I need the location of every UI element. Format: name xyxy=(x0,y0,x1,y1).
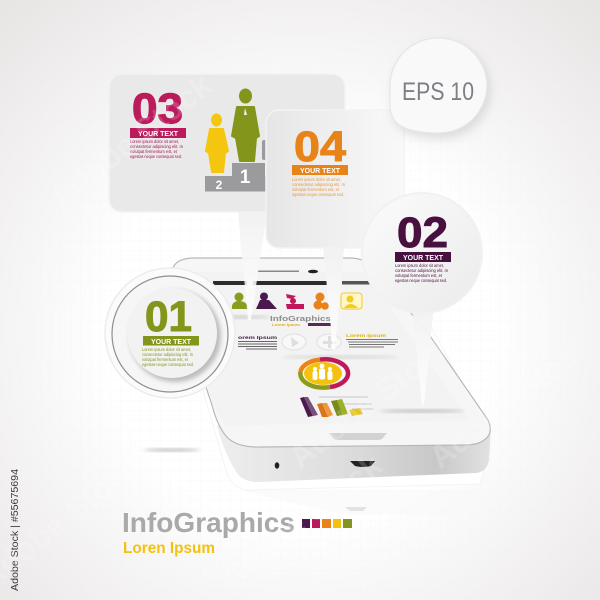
color squares xyxy=(302,519,352,528)
watermark: Adobe Stock xyxy=(42,67,219,216)
label bar 04: YOUR TEXT xyxy=(300,168,341,175)
pin 02 xyxy=(362,193,482,405)
podium: 1 xyxy=(240,167,251,188)
body text 02: Lorem ipsum dolor sit amet, xyxy=(395,263,444,268)
podium xyxy=(205,140,266,192)
body text 04: volutpat fermentum est, et xyxy=(292,187,340,192)
body text 01: volutpat fermentum est, et xyxy=(142,357,189,362)
phone body side xyxy=(217,425,491,482)
body text 02: consectetur adipiscing elit. In xyxy=(395,268,448,273)
person: green xyxy=(232,90,259,161)
body text 01: consectetur adipiscing elit. In xyxy=(142,352,193,357)
circle 01 outer ring xyxy=(105,268,235,398)
person: yellow xyxy=(206,114,228,172)
label bar 02 xyxy=(395,252,451,262)
home button xyxy=(329,433,387,440)
screen text right: Lorem Ipsum xyxy=(346,333,386,339)
podium: 2 xyxy=(216,178,223,192)
body text 03: volutpat fermentum est, et xyxy=(130,149,178,154)
body text 03 xyxy=(130,139,183,159)
ring chart xyxy=(296,356,350,390)
panel 04 xyxy=(266,110,404,350)
label bar 03 xyxy=(130,128,186,138)
icon: green person xyxy=(232,292,248,309)
shadow under buttons xyxy=(282,355,398,359)
phone face xyxy=(170,258,490,447)
watermark: Adobe Stock xyxy=(422,327,599,476)
body text 04: Lorem ipsum dolor sit amet, xyxy=(292,177,341,182)
stock credit: Adobe Stock | #55675694 xyxy=(9,469,21,591)
watermark: Adobe Stock xyxy=(212,447,389,596)
pin 02 circle xyxy=(362,193,482,313)
shadow under icons xyxy=(210,315,270,319)
phone reflection xyxy=(240,490,486,515)
icon: purple person xyxy=(256,292,277,309)
circle 01 inner xyxy=(129,290,221,382)
body text 03: Lorem ipsum dolor sit amet, xyxy=(130,139,179,144)
body text 04 xyxy=(292,177,345,197)
subtitle: Loren Ipsum xyxy=(123,540,215,557)
screen mini title xyxy=(270,314,331,327)
number 01: 01 xyxy=(145,293,192,341)
title: InfoGraphics xyxy=(122,507,295,538)
body text 02: volutpat fermentum est, et xyxy=(395,273,443,278)
label bar 02: YOUR TEXT xyxy=(403,255,444,262)
screen text left xyxy=(238,335,277,350)
number 02: 02 xyxy=(397,209,448,257)
body text 04: egestas neque consequat sed. xyxy=(292,192,344,197)
number 04: 04 xyxy=(294,123,346,171)
icon: yellow card xyxy=(341,293,362,309)
number 03: 03 xyxy=(132,85,183,133)
icon: crimson person xyxy=(286,294,304,309)
body text 02: egestas neque consequat sed. xyxy=(395,278,447,283)
badge: EPS 10: EPS 10 xyxy=(402,78,474,106)
watermark: Adobe Stock xyxy=(282,327,459,476)
ring people xyxy=(312,364,332,380)
body text 01: egestas neque consequat sed. xyxy=(142,362,194,367)
title xyxy=(122,507,352,557)
label bar 03: YOUR TEXT xyxy=(138,131,179,138)
phone outer halo xyxy=(180,260,492,490)
circle 01 xyxy=(105,268,235,398)
screen icons row xyxy=(232,292,362,310)
badge: EPS 10 xyxy=(390,38,487,133)
shadow under pin 02 xyxy=(380,409,464,413)
label bar 01: YOUR TEXT xyxy=(151,339,192,346)
3D bar chart xyxy=(300,397,374,417)
label bar 04 xyxy=(292,165,348,175)
icon: orange people xyxy=(314,292,329,310)
screen text left: orem Ipsum xyxy=(238,335,277,341)
body text 03: consectetur adipiscing elit. In xyxy=(130,144,183,149)
panel 03 background xyxy=(109,74,345,212)
body text 02 xyxy=(395,263,448,283)
usb port xyxy=(350,461,375,467)
panel 03 xyxy=(109,74,345,320)
phone screen xyxy=(180,272,470,426)
body text 01: Lorem ipsum dolor sit amet, xyxy=(142,347,191,352)
screen mini title: InfoGraphics xyxy=(270,314,331,323)
screen header bars xyxy=(213,270,371,285)
speaker hole xyxy=(275,462,279,469)
pin 02 stem xyxy=(412,305,434,405)
screen mini title: Lorem Ipsum xyxy=(272,323,301,327)
body text 03: egestas neque consequat sed. xyxy=(130,154,182,159)
body text 04: consectetur adipiscing elit. In xyxy=(292,182,345,187)
body text 01 xyxy=(142,347,194,367)
phone shadow on the left xyxy=(144,448,200,452)
panel 04 pointer xyxy=(323,247,344,350)
panel 04 background xyxy=(266,110,404,248)
panel 03 pointer xyxy=(238,212,267,320)
screen text right xyxy=(346,333,398,348)
smartphone xyxy=(170,258,492,490)
screen round buttons xyxy=(282,334,341,350)
